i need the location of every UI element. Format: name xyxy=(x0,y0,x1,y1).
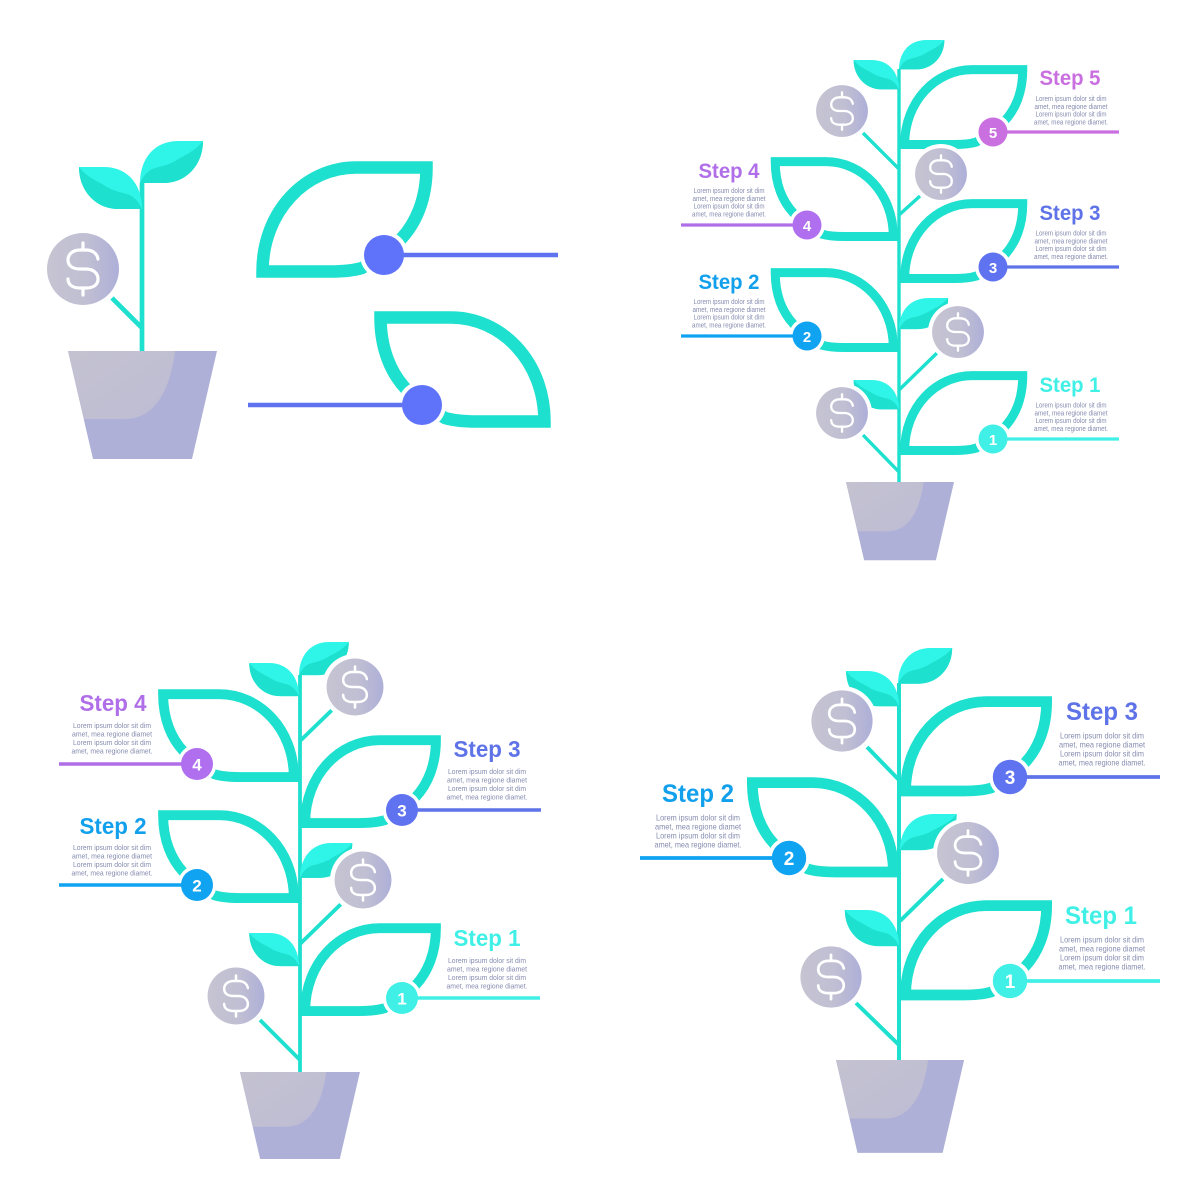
coins xyxy=(208,654,396,1024)
panel: four step plant xyxy=(59,642,541,1159)
icon: sprout leaf left xyxy=(79,167,142,209)
step 4 marker xyxy=(681,207,825,243)
plant pot xyxy=(68,351,217,459)
step 2 text: Lorem ipsum dolor sit dim xyxy=(656,830,740,840)
step 2 text: Step 2 xyxy=(662,780,734,808)
step 2 text: amet, mea regione diamet. xyxy=(654,840,742,850)
step 3 text: Lorem ipsum dolor sit dim xyxy=(1036,246,1107,253)
step 3 text: Lorem ipsum dolor sit dim xyxy=(1060,748,1144,758)
step 2 leaf xyxy=(775,273,893,348)
step 3 leaf xyxy=(905,204,1023,279)
step 1 text: amet, mea regione diamet xyxy=(1059,944,1146,954)
step 1 text: Lorem ipsum dolor sit dim xyxy=(1060,934,1144,944)
step 1 marker xyxy=(989,960,1160,1002)
step 3 text: amet, mea regione diamet. xyxy=(446,792,528,802)
step 1 text: Step 1 xyxy=(454,925,521,951)
plant stem and branches xyxy=(856,683,943,1061)
step 4 leaf xyxy=(163,694,294,777)
step 3 marker xyxy=(989,756,1160,798)
step 4 marker: 4 xyxy=(192,756,202,774)
step 3 text: Lorem ipsum dolor sit dim xyxy=(448,767,526,776)
plant stem and branches xyxy=(863,69,937,483)
step 1 text: Lorem ipsum dolor sit dim xyxy=(448,956,526,965)
step 1 text: amet, mea regione diamet. xyxy=(1034,426,1108,433)
step 4 text xyxy=(692,160,766,218)
step 4 text: Step 4 xyxy=(698,160,760,183)
step 2 text: amet, mea regione diamet xyxy=(692,307,766,314)
step 1 text: amet, mea regione diamet. xyxy=(1058,962,1146,972)
coins xyxy=(800,686,1003,1008)
step 3 marker xyxy=(975,249,1119,285)
step 1 leaf xyxy=(905,376,1023,451)
panel: small plant with leaf parts xyxy=(47,141,558,459)
step 4 text: Lorem ipsum dolor sit dim xyxy=(73,738,151,747)
step 2 leaf xyxy=(752,783,893,872)
step 3 text: Step 3 xyxy=(1066,698,1138,726)
step 2 marker: 2 xyxy=(784,849,794,870)
step 1 text: Lorem ipsum dolor sit dim xyxy=(1036,418,1107,425)
step 2 text: amet, mea regione diamet xyxy=(72,852,153,860)
step 3 text: amet, mea regione diamet xyxy=(1034,238,1108,245)
step 4 marker xyxy=(59,744,216,784)
step 2 text: amet, mea regione diamet xyxy=(655,822,742,832)
step 2 text: Lorem ipsum dolor sit dim xyxy=(656,812,740,822)
step 2 marker: 2 xyxy=(192,876,202,896)
marker top xyxy=(360,231,558,279)
step 3 marker: 3 xyxy=(989,260,997,277)
step 5 marker: 5 xyxy=(989,125,997,142)
step 2 text xyxy=(72,813,153,878)
plant pot xyxy=(240,1072,360,1159)
step 4 marker: 4 xyxy=(803,218,812,235)
icon: dollar coin xyxy=(47,233,119,305)
step 1 text: Lorem ipsum dolor sit dim xyxy=(1060,952,1144,962)
step 2 text: amet, mea regione diamet. xyxy=(72,868,152,878)
step 1 marker: 1 xyxy=(989,432,997,449)
step 4 text: Lorem ipsum dolor sit dim xyxy=(73,721,151,730)
step 2 text: Lorem ipsum dolor sit dim xyxy=(694,299,765,306)
coins xyxy=(812,81,988,443)
step 3 text xyxy=(1058,698,1146,768)
step 2 marker xyxy=(681,318,825,354)
plant stem xyxy=(112,183,142,352)
plant pot xyxy=(846,482,954,560)
leaf outline top xyxy=(262,168,426,272)
step 1 text xyxy=(446,925,528,990)
step 5 text: Lorem ipsum dolor sit dim xyxy=(1036,96,1107,103)
step 5 leaf xyxy=(905,70,1023,145)
step 3 text: Step 3 xyxy=(454,736,520,762)
step 2 marker xyxy=(59,866,216,904)
step 4 text: amet, mea regione diamet. xyxy=(72,746,152,756)
step 1 marker xyxy=(382,978,540,1018)
step 2 text xyxy=(692,271,766,329)
step 5 text: Lorem ipsum dolor sit dim xyxy=(1036,112,1107,119)
step 1 text: amet, mea regione diamet. xyxy=(446,982,528,990)
step 3 text: Step 3 xyxy=(1040,202,1100,225)
plant stem and branches xyxy=(260,675,341,1073)
step 1 text xyxy=(1058,902,1146,972)
step 3 text: amet, mea regione diamet. xyxy=(1034,254,1108,261)
step 3 leaf xyxy=(906,702,1047,791)
step 4 text: Lorem ipsum dolor sit dim xyxy=(694,188,765,195)
step 2 leaf xyxy=(163,815,294,898)
step 2 text: Step 2 xyxy=(698,271,760,294)
leaf outline bottom xyxy=(380,318,544,422)
step 4 text: amet, mea regione diamet xyxy=(692,196,766,203)
step 1 text: Step 1 xyxy=(1065,902,1137,930)
step 1 text: amet, mea regione diamet xyxy=(1034,410,1108,417)
plant pot xyxy=(836,1060,964,1153)
step 2 text: Lorem ipsum dolor sit dim xyxy=(73,843,151,852)
step 3 marker xyxy=(382,790,541,830)
step 2 text xyxy=(654,780,742,850)
marker bottom xyxy=(248,381,446,429)
step 3 text xyxy=(1034,202,1108,261)
step 4 text: Step 4 xyxy=(80,690,147,716)
step 3 text: amet, mea regione diamet. xyxy=(1058,758,1146,768)
step 4 text: amet, mea regione diamet. xyxy=(692,211,766,218)
step 2 text: Lorem ipsum dolor sit dim xyxy=(694,315,765,322)
step 4 text xyxy=(72,690,153,756)
step 3 text: amet, mea regione diamet xyxy=(447,776,528,784)
step 1 leaf xyxy=(906,906,1047,995)
step 4 text: Lorem ipsum dolor sit dim xyxy=(694,204,765,211)
step 1 leaf xyxy=(305,928,436,1011)
step 1 marker: 1 xyxy=(1005,972,1016,993)
step 3 text xyxy=(446,736,528,802)
step 3 text: Lorem ipsum dolor sit dim xyxy=(448,784,526,793)
step 1 marker xyxy=(975,421,1119,457)
panel: five step plant xyxy=(681,40,1119,560)
step 5 text: amet, mea regione diamet xyxy=(1034,104,1108,111)
leaves xyxy=(854,40,948,409)
step 1 marker: 1 xyxy=(397,990,407,1008)
icon: sprout leaf right xyxy=(140,141,203,183)
panel: three step plant xyxy=(640,648,1160,1153)
step 3 text: Lorem ipsum dolor sit dim xyxy=(1060,730,1144,740)
step 4 text: amet, mea regione diamet xyxy=(72,730,153,738)
step 2 text: Lorem ipsum dolor sit dim xyxy=(73,860,151,869)
step 1 text xyxy=(1034,374,1108,433)
step 3 text: amet, mea regione diamet xyxy=(1059,740,1146,750)
step 5 marker xyxy=(975,114,1119,150)
step 1 text: Lorem ipsum dolor sit dim xyxy=(448,973,526,982)
step 5 text xyxy=(1034,67,1108,126)
step 1 text: amet, mea regione diamet xyxy=(447,964,528,974)
step 2 text: Step 2 xyxy=(80,813,146,839)
leaves xyxy=(249,642,352,966)
step 5 text: amet, mea regione diamet. xyxy=(1034,119,1108,126)
step 2 marker: 2 xyxy=(803,329,811,346)
step 1 text: Lorem ipsum dolor sit dim xyxy=(1036,402,1107,410)
step 3 marker: 3 xyxy=(397,802,407,820)
step 3 marker: 3 xyxy=(1005,768,1015,789)
step 1 text: Step 1 xyxy=(1040,374,1101,397)
step 2 text: amet, mea regione diamet. xyxy=(692,322,766,329)
step 2 marker xyxy=(640,837,810,879)
leaves xyxy=(845,648,957,946)
step 3 leaf xyxy=(305,740,436,823)
step 4 leaf xyxy=(775,162,893,237)
step 5 text: Step 5 xyxy=(1040,67,1101,90)
step 3 text: Lorem ipsum dolor sit dim xyxy=(1036,230,1107,238)
